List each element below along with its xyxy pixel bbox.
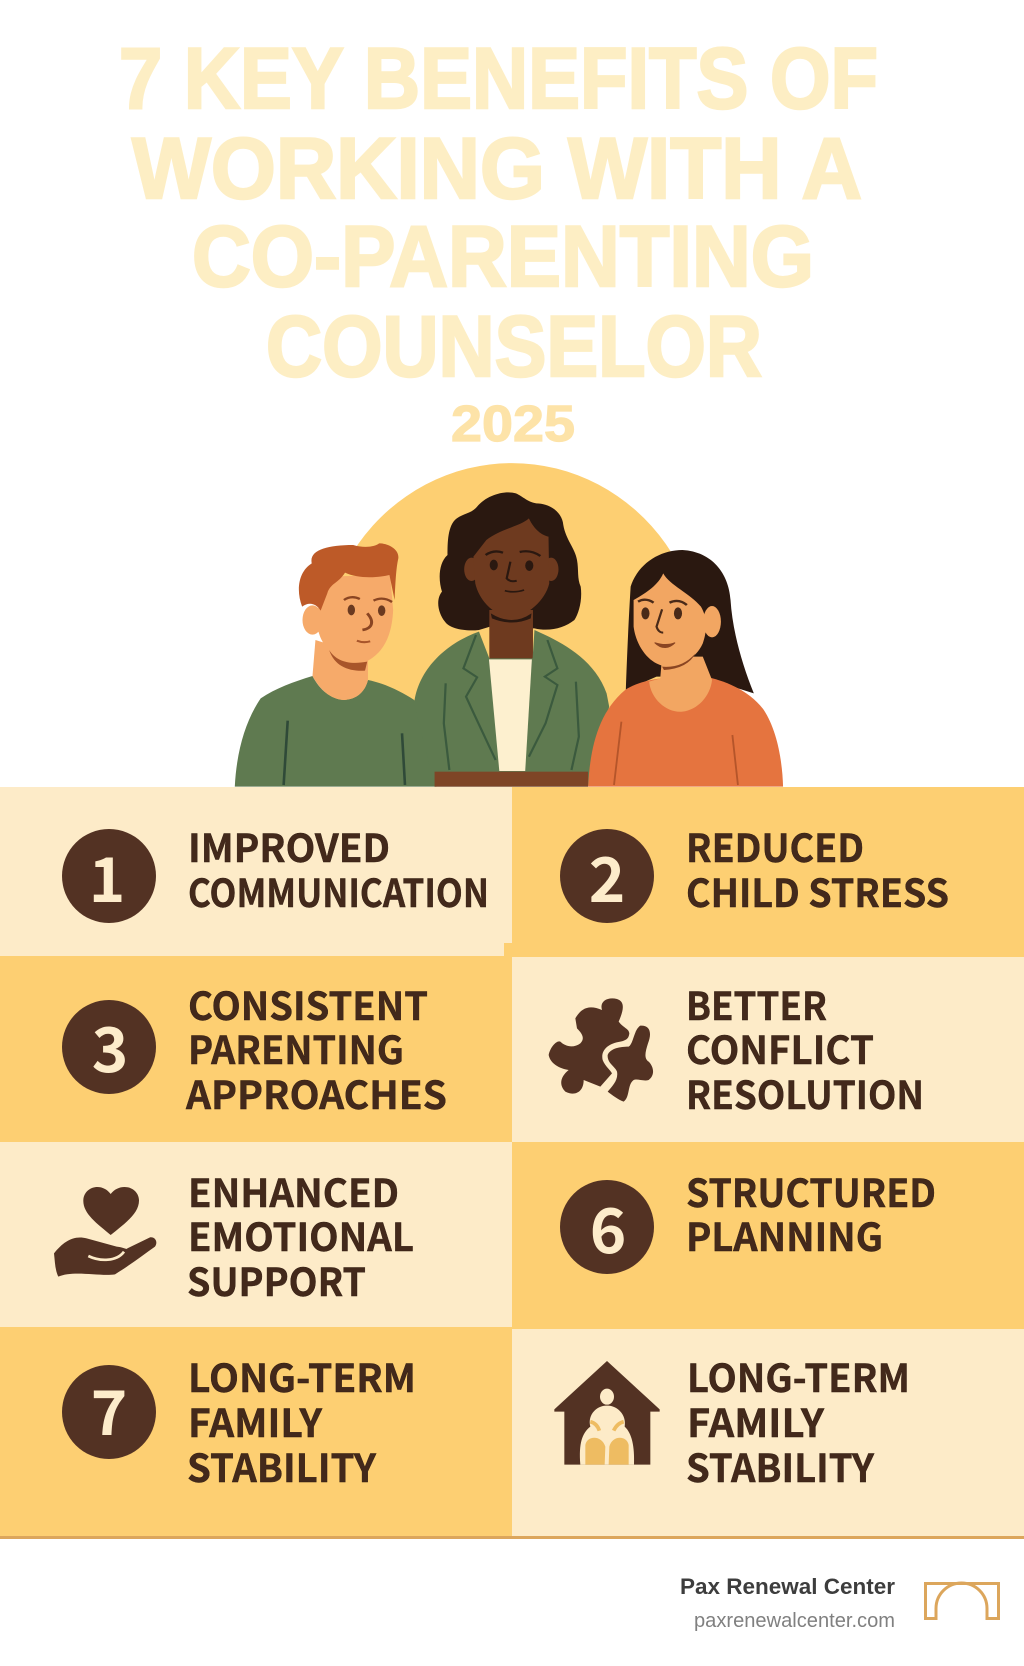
- number badge 2: [560, 829, 654, 923]
- label: reduced child stress: [686, 818, 949, 919]
- illustration: three people: [235, 463, 783, 787]
- panel: 8 long-term family stability with house: [512, 1329, 1024, 1536]
- title: 7 KEY BENEFITS OF: [119, 31, 878, 127]
- label: enhanced emotional support: [187, 1163, 414, 1308]
- logo: arch: [926, 1583, 998, 1618]
- number badge 3: [62, 1000, 156, 1094]
- panel: 7 long-term family stability: [0, 1327, 512, 1536]
- label: enhanced emotional support: EMOTIONAL: [188, 1207, 414, 1263]
- number badge 1: 1: [89, 830, 125, 920]
- number badge 3: 3: [92, 1000, 128, 1090]
- title: COUNSELOR: [266, 299, 762, 395]
- panel: 6 structured planning: [512, 1142, 1024, 1329]
- title: WORKING WITH A: [132, 121, 862, 217]
- label: consistent parenting approaches: APPROACHES: [185, 1065, 447, 1121]
- label: long-term family stability: STABILITY: [686, 1438, 875, 1494]
- label: better conflict resolution: BETTER: [686, 976, 827, 1032]
- panel: 5 enhanced emotional support: [0, 1142, 512, 1327]
- year: 2025: [451, 395, 575, 452]
- label: long-term family stability: FAMILY: [188, 1393, 323, 1449]
- label: long-term family stability: [187, 1348, 416, 1494]
- label: reduced child stress: REDUCED: [686, 818, 864, 874]
- label: improved communication: IMPROVED: [188, 818, 390, 874]
- label: better conflict resolution: CONFLICT: [686, 1020, 874, 1076]
- figure: woman in orange sweater: [588, 550, 783, 787]
- label: long-term family stability: LONG-TERM: [188, 1348, 416, 1404]
- label: reduced child stress: CHILD STRESS: [686, 863, 949, 919]
- label: long-term family stability: STABILITY: [187, 1438, 377, 1494]
- label: long-term family stability: FAMILY: [687, 1393, 825, 1449]
- label: improved communication: [188, 818, 489, 919]
- icon: family in house: [554, 1361, 660, 1465]
- label: long-term family stability: [686, 1348, 910, 1494]
- footer brand name: Pax Renewal Center: [680, 1574, 895, 1599]
- number badge 7: [62, 1363, 156, 1459]
- panel: 2 reduced child stress: [512, 787, 1024, 957]
- label: long-term family stability: LONG-TERM: [687, 1348, 910, 1404]
- number badge 2: 2: [589, 830, 625, 920]
- label: structured planning: [686, 1163, 936, 1263]
- label: consistent parenting approaches: [185, 976, 447, 1121]
- figure: man in green sweater: [235, 543, 436, 787]
- number badge 1: [62, 829, 156, 923]
- label: consistent parenting approaches: CONSISTENT: [188, 976, 428, 1032]
- label: better conflict resolution: RESOLUTION: [686, 1065, 924, 1121]
- number badge 6: 6: [590, 1181, 626, 1271]
- label: consistent parenting approaches: PARENTING: [188, 1020, 404, 1076]
- number badge 6: [560, 1180, 654, 1274]
- icon: heart in hand: [54, 1187, 156, 1277]
- label: structured planning: STRUCTURED: [686, 1163, 936, 1219]
- panel: 4 better conflict resolution: [512, 957, 1024, 1142]
- label: improved communication: COMMUNICATION: [188, 863, 489, 919]
- figure: counselor in green blazer: [414, 492, 609, 787]
- title: CO-PARENTING: [192, 209, 814, 305]
- title: [119, 31, 878, 395]
- label: enhanced emotional support: SUPPORT: [187, 1252, 366, 1308]
- icon: puzzle pieces: [549, 998, 653, 1102]
- label: structured planning: PLANNING: [686, 1207, 883, 1263]
- panel: 1 improved communication: [0, 787, 512, 956]
- footer website: paxrenewalcenter.com: [694, 1610, 895, 1632]
- label: better conflict resolution: [686, 976, 924, 1121]
- label: enhanced emotional support: ENHANCED: [188, 1163, 399, 1219]
- panel: 3 consistent parenting approaches: [0, 956, 512, 1142]
- number badge 7: 7: [91, 1363, 127, 1453]
